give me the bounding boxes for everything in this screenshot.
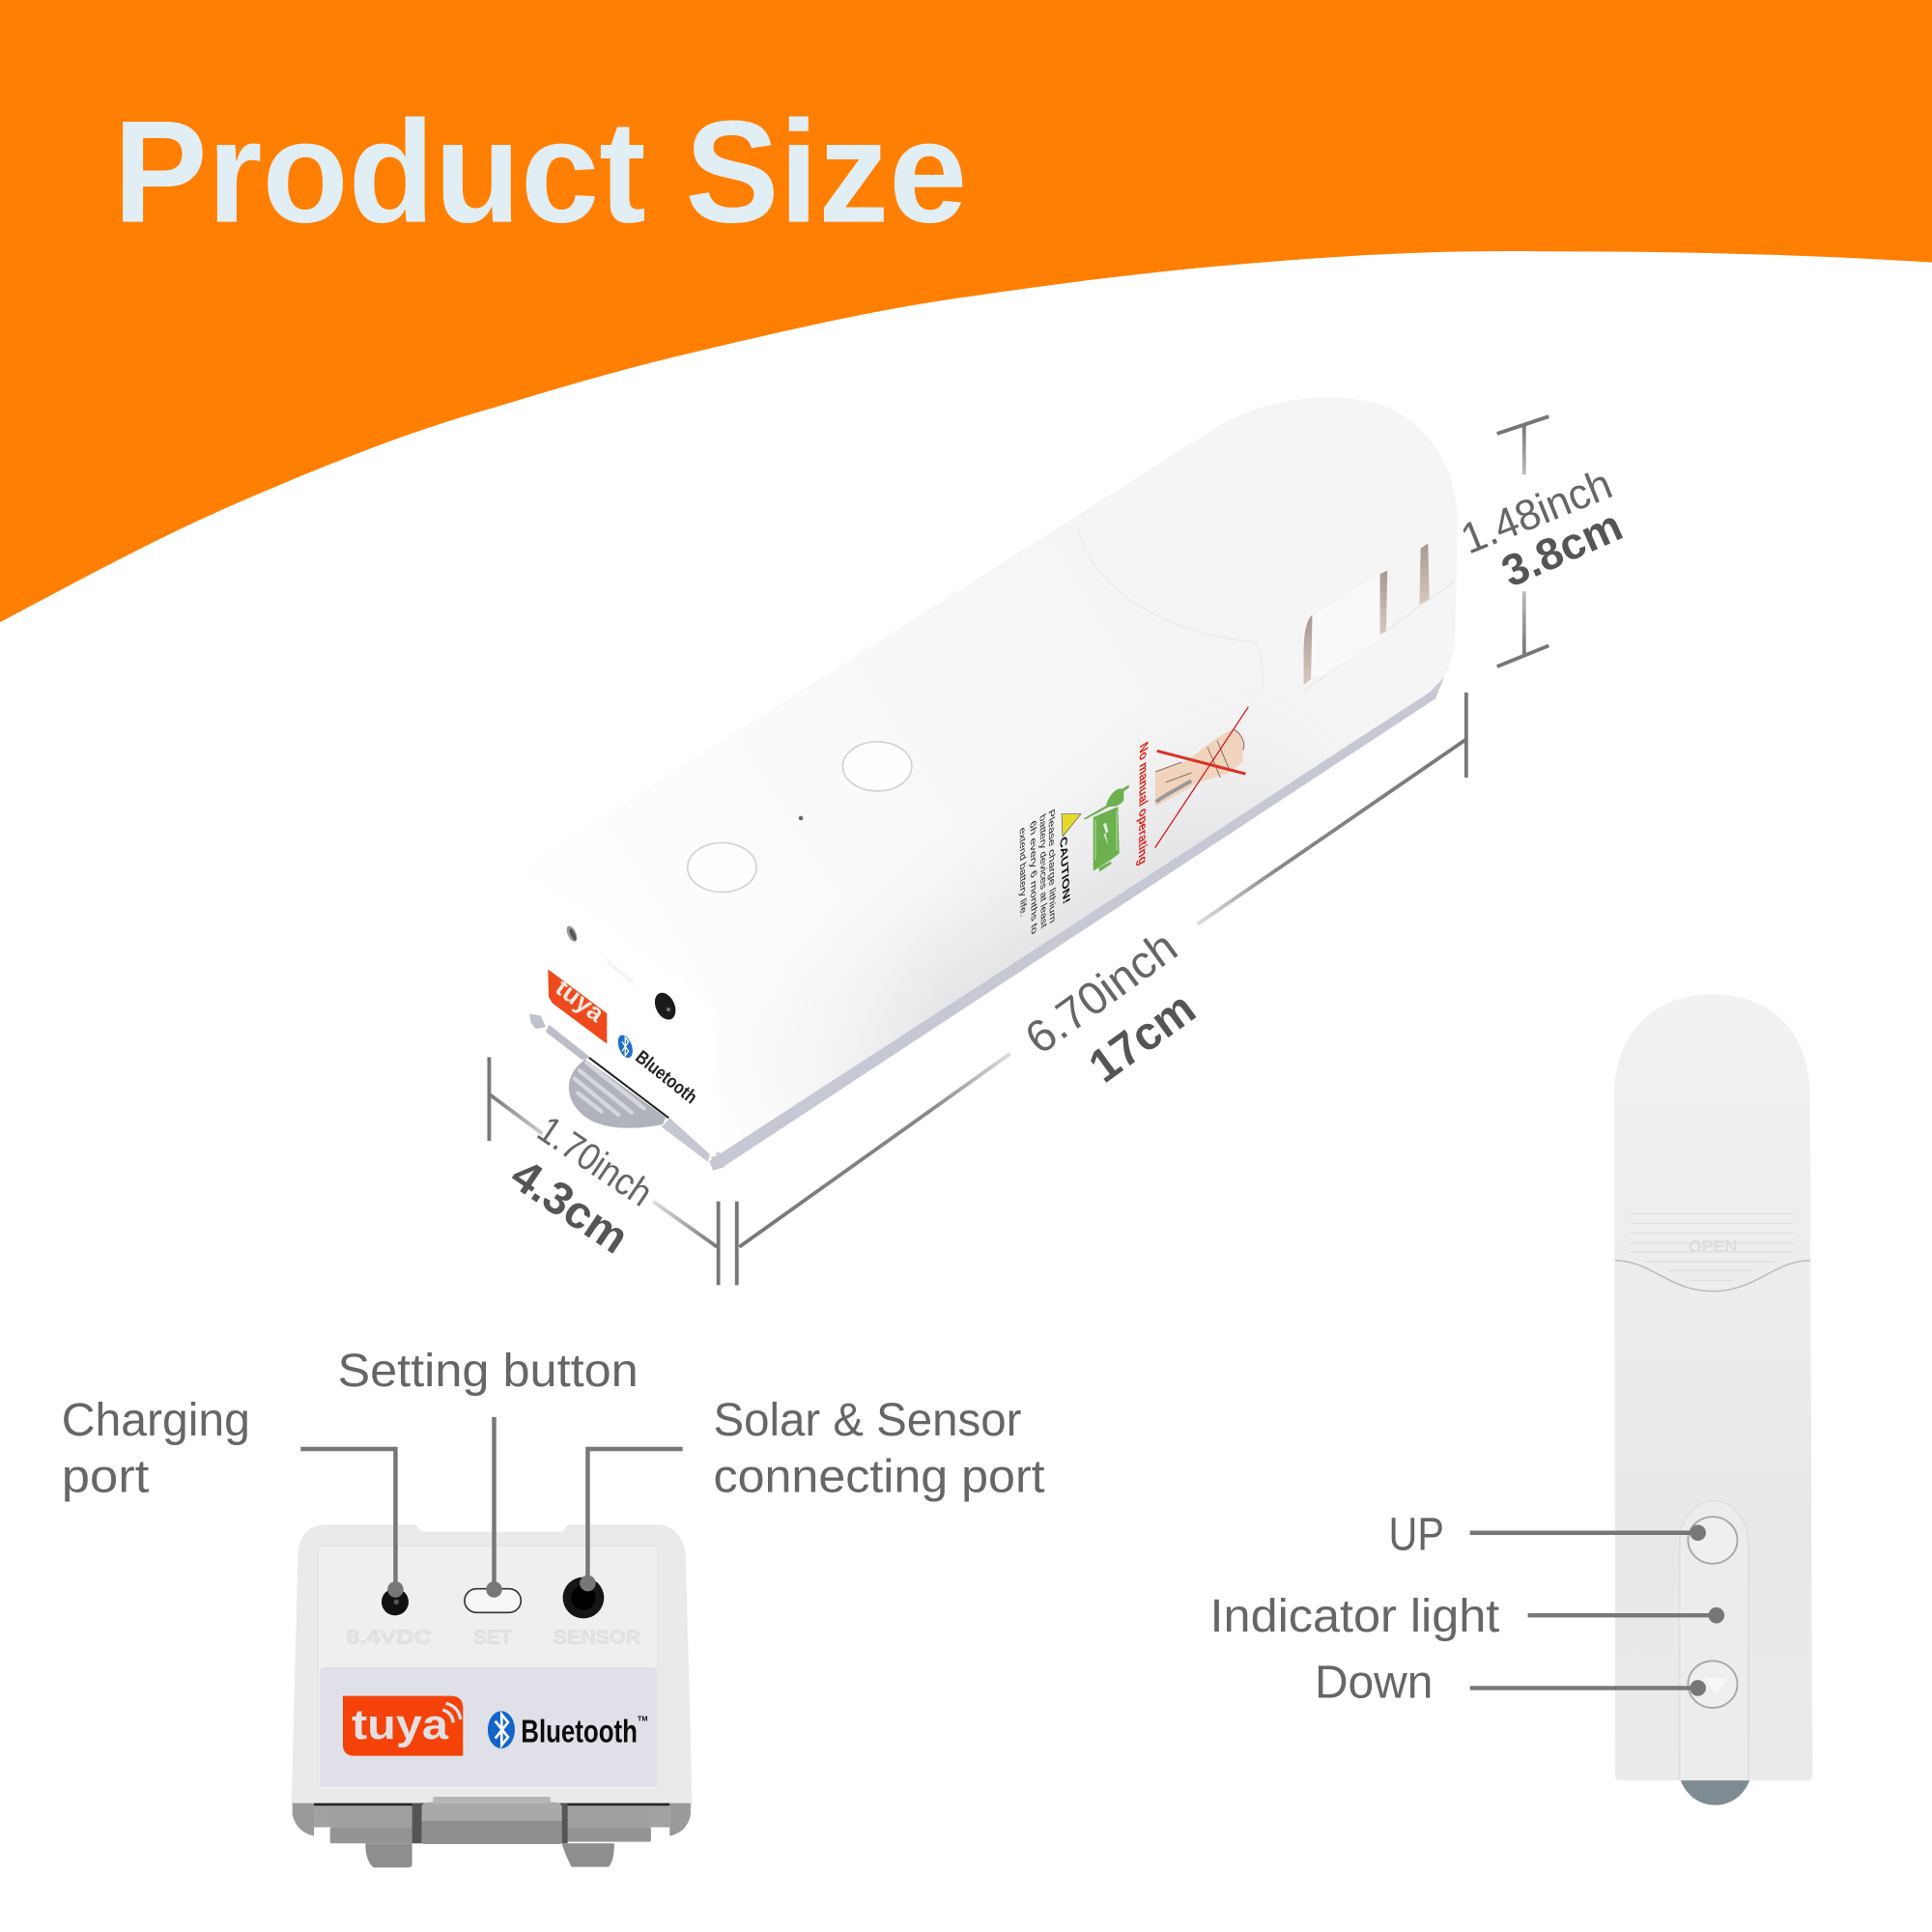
label: solar and sensor port: connecting port (714, 1451, 1045, 1503)
embossed labels: SENSOR (554, 1627, 640, 1649)
caution paragraph: extend battery life. (1017, 825, 1027, 920)
pull tab (569, 1060, 666, 1128)
bluetooth logo (488, 1711, 648, 1749)
inner panel (318, 1546, 658, 1790)
tray strip right (662, 1118, 710, 1162)
tuya logo (343, 1696, 463, 1756)
tuya logo: tuya (352, 1701, 449, 1748)
tray end left (529, 1013, 546, 1029)
down arrow mark (1705, 1678, 1726, 1694)
label: solar and sensor port (714, 1394, 1045, 1503)
front panel face (524, 872, 718, 1157)
callouts: front panel labels (62, 1345, 1045, 1503)
dimension lines (489, 1094, 542, 1133)
grey pull tab (1681, 1780, 1749, 1805)
set button (465, 1589, 521, 1612)
dimension value in inches: 6.70inch (1016, 921, 1186, 1065)
tray strip left (546, 1025, 591, 1060)
embossed labels: SET (473, 1627, 512, 1649)
slot (589, 1058, 668, 1118)
caution paragraph: 6h every 6 months to (1028, 819, 1038, 937)
embossed labels: 8.4VDC (346, 1627, 432, 1649)
dimension: height 1.48inch / 3.8cm (1455, 416, 1630, 667)
tuya logo: tuya (551, 974, 610, 1028)
sticker (321, 1667, 657, 1787)
title: Product Size (113, 91, 967, 253)
up button (1688, 1517, 1737, 1564)
side face shading (823, 773, 1306, 1084)
body outline (1614, 994, 1812, 1780)
dimension value in cm: 4.3cm (501, 1150, 638, 1264)
label: setting button: Setting button (337, 1345, 639, 1397)
icon: green battery with plug (1084, 785, 1129, 871)
dimension value in cm: 17cm (1080, 981, 1205, 1093)
tuya logo (548, 969, 610, 1044)
bluetooth logo: Bluetooth (521, 1714, 638, 1749)
icon: crossed-out hand (1155, 707, 1248, 848)
dimension lines (1198, 739, 1466, 924)
no manual operating text: No manual operating (1135, 740, 1150, 868)
caution paragraph (1017, 808, 1057, 937)
label: up: UP (1389, 1509, 1444, 1561)
front panel (524, 872, 724, 1171)
open marking: OPEN (1689, 1236, 1737, 1256)
indicator light (799, 816, 803, 820)
caution paragraph: battery devices at least (1037, 812, 1048, 930)
dimension value in cm: 3.8cm (1494, 499, 1630, 597)
down button (1688, 1661, 1737, 1708)
lid ridges (1631, 1213, 1794, 1280)
leader lines for top view (1470, 1524, 1724, 1696)
charging jack (382, 1588, 409, 1615)
callouts: top view labels (1210, 1509, 1500, 1709)
button channel (1680, 1501, 1748, 1780)
dimension lines (1522, 425, 1525, 474)
dimension: width 1.70inch / 4.3cm (489, 1057, 719, 1285)
orange header banner (0, 0, 1932, 622)
caution paragraph: Please charge lithium (1046, 808, 1057, 925)
hole (564, 924, 580, 943)
tray end right (709, 1157, 724, 1171)
label: charging port (62, 1394, 250, 1503)
bluetooth logo: Bluetooth (632, 1047, 700, 1108)
front end module view (292, 1524, 693, 1867)
dimension: length 6.70inch / 17cm (737, 693, 1466, 1285)
lid seam (1615, 1261, 1810, 1292)
label: solar and sensor port: Solar & Sensor (714, 1394, 1021, 1446)
warning label (1017, 707, 1248, 937)
lid seam (1078, 527, 1263, 688)
dimension value in inches: 1.70inch (530, 1108, 660, 1215)
label: charging port: port (62, 1451, 150, 1503)
bluetooth logo: TM (638, 1715, 648, 1723)
leader lines for front panel (300, 1417, 683, 1598)
bottom tray (293, 1797, 691, 1867)
set button outline (606, 956, 634, 986)
dimension value in inches: 1.48inch (1455, 461, 1619, 563)
label: charging port: Charging (62, 1394, 250, 1446)
top buttons (688, 742, 912, 892)
embossed labels (346, 1627, 640, 1649)
label: down: Down (1315, 1657, 1433, 1709)
remote-style top view of device (1614, 994, 1812, 1805)
device body (524, 397, 1458, 1158)
main product: motor unit in perspective (524, 397, 1458, 1171)
label: indicator light: Indicator light (1210, 1590, 1500, 1642)
side slots (1303, 543, 1454, 692)
sensor jack (563, 1577, 604, 1618)
caution triangle (1062, 814, 1081, 837)
caution text: CAUTION! (1058, 834, 1072, 907)
socket (651, 989, 680, 1023)
module shell (292, 1524, 693, 1804)
grey base strip (710, 678, 1444, 1167)
bluetooth logo (615, 1033, 700, 1108)
